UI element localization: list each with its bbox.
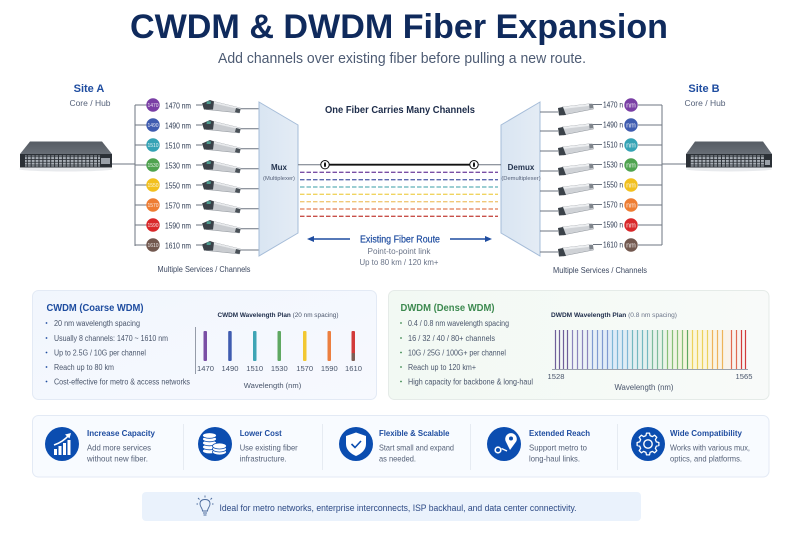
benefit: flexible and scalable: Start small and expand (379, 444, 454, 452)
benefit: increase capacity: Increase Capacity (87, 428, 155, 438)
channel 1470: 1470 n (603, 100, 623, 110)
icon: site A switch (19, 142, 113, 172)
benefit: wide compatibility: optics, and platforms. (670, 454, 742, 464)
route detail: Point-to-point link (368, 246, 431, 256)
chart: CWDM wavelength plan: 1490 (222, 364, 238, 373)
CWDM bullet list (46, 319, 190, 386)
benefit: lower cost: Lower Cost (240, 428, 282, 438)
chart: DWDM wavelength plan: 1565 (736, 372, 752, 381)
mux block: Mux (271, 163, 288, 172)
demux block (501, 102, 541, 256)
channel 1590: 1590 nm (165, 220, 191, 230)
channel 1490: 1490 nm (165, 120, 191, 130)
benefit: extended reach: long-haul links. (529, 454, 580, 464)
arrow: route left (307, 236, 350, 242)
DWDM heading: DWDM (Dense WDM) (400, 303, 494, 314)
chart: CWDM wavelength plan: 1470 (197, 364, 214, 373)
channel 1590: 1590 n (603, 220, 623, 230)
channel 1550: 1550 nm (165, 180, 191, 190)
channel 1570: 1570 nm (165, 200, 191, 210)
site B heading: Site B (688, 83, 720, 95)
channel 1530 (146, 158, 259, 173)
channel 1530: 1530 nm (165, 160, 191, 170)
channel 1550: 1550 n (603, 180, 623, 190)
CWDM heading: CWDM (Coarse WDM) (46, 303, 144, 314)
fiber link (298, 160, 501, 169)
panel: benefits (32, 416, 769, 477)
channel 1610 (540, 238, 638, 256)
benefit: flexible and scalable (339, 427, 454, 464)
channel 1610: 1610 nm (165, 240, 191, 250)
benefit: increase capacity: without new fiber. (86, 454, 148, 464)
route detail: Up to 80 km / 120 km+ (360, 257, 439, 267)
chart: CWDM wavelength plan: CWDM Wavelength Plan (20 nm spacing) (218, 312, 338, 319)
channel 1550 (146, 178, 259, 193)
route label: Existing Fiber Route (360, 234, 440, 246)
channel 1470 (540, 98, 638, 116)
callout: ideal uses (142, 492, 641, 521)
channel 1470: nm (626, 102, 636, 110)
channel 1530 (540, 158, 638, 176)
site B bus wiring (638, 105, 686, 245)
icon: route pins (487, 427, 521, 461)
icon: shield (339, 427, 373, 461)
channel 1570 (146, 198, 259, 213)
channel 1510: 1510 n (603, 140, 623, 150)
benefit: wide compatibility (631, 427, 750, 464)
chart: CWDM wavelength plan: 1610 (345, 364, 362, 373)
benefit: lower cost: Use existing fiber (240, 444, 298, 452)
channel 1570: nm (626, 202, 636, 210)
route detail (360, 246, 439, 267)
DWDM bullet list: 0.4 / 0.8 nm wavelength spacing (408, 319, 509, 328)
CWDM bullet list: Usually 8 channels: 1470 ~ 1610 nm (54, 334, 168, 343)
channel 1550: 1550 (147, 183, 159, 189)
channel 1530: 1530 (147, 163, 159, 169)
CWDM bullet list: 20 nm wavelength spacing (54, 319, 140, 328)
title: CWDM & DWDM Fiber Expansion (130, 8, 668, 46)
site A role: Core / Hub (69, 98, 111, 108)
icon: coins (198, 427, 232, 461)
CWDM bullet list: Reach up to 80 km (54, 363, 114, 372)
channel 1510: nm (626, 142, 636, 150)
benefit: lower cost (198, 427, 298, 464)
CWDM bullet list: Up to 2.5G / 10G per channel (54, 348, 146, 358)
benefit: flexible and scalable: as needed. (379, 454, 416, 464)
DWDM bullet list: Reach up to 120 km+ (408, 363, 476, 372)
channel 1530: nm (626, 162, 636, 170)
benefit: wide compatibility: Works with various mux, (670, 444, 750, 452)
channel 1490: nm (626, 122, 636, 130)
channel 1610 (146, 238, 259, 254)
channel 1510 (540, 138, 638, 156)
site A heading: Site A (74, 83, 104, 95)
chart: CWDM wavelength plan (196, 312, 362, 390)
channel 1510 (146, 138, 259, 153)
demux block: Demux (508, 163, 535, 172)
channel 1470: 1470 (147, 103, 159, 109)
panel: site A network diagram (19, 83, 259, 274)
panel: CWDM (32, 290, 376, 400)
chart: CWDM wavelength plan: 1570 (296, 364, 313, 373)
benefit: extended reach: Extended Reach (529, 428, 590, 438)
panel: DWDM (388, 290, 769, 400)
benefit: flexible and scalable: Flexible & Scalable (379, 428, 450, 438)
DWDM bullet list: 10G / 25G / 100G+ per channel (408, 348, 506, 358)
channel 1490 (146, 118, 259, 133)
channel 1610: 1610 (147, 243, 159, 249)
channel 1510: 1510 nm (165, 140, 191, 150)
arrow: route right (450, 236, 492, 242)
chart: DWDM wavelength plan (548, 312, 752, 392)
channel 1590: 1590 (147, 223, 159, 229)
channel 1570: 1570 n (603, 200, 623, 210)
subtitle: Add channels over existing fiber before pulling a new route. (218, 51, 586, 67)
mux block (259, 102, 298, 256)
site A caption: Multiple Services / Channels (158, 265, 250, 274)
icon: gear (631, 427, 665, 461)
site B caption: Multiple Services / Channels (553, 266, 647, 275)
chart: CWDM wavelength plan: 1590 (321, 364, 338, 373)
demux block: (Demultiplexer) (501, 176, 541, 182)
benefit: wide compatibility: Wide Compatibility (670, 428, 742, 438)
channel 1470 (146, 98, 259, 113)
chart: CWDM wavelength plan: 1510 (246, 364, 263, 373)
site A bus wiring (112, 105, 147, 246)
icon: light bulb (196, 496, 214, 515)
channel 1590 (146, 218, 259, 233)
channel 1490: 1490 (147, 123, 159, 129)
icon: growth chart (45, 427, 79, 461)
channel 1490 (540, 118, 638, 136)
panel: site B network diagram (540, 83, 772, 275)
channel 1490: 1490 n (603, 120, 623, 130)
benefit: increase capacity: Add more services (87, 444, 151, 452)
chart: CWDM wavelength plan: Wavelength (nm) (244, 381, 302, 390)
chart: CWDM wavelength plan: 1530 (271, 364, 288, 373)
chart: DWDM wavelength plan: Wavelength (nm) (614, 383, 674, 392)
DWDM bullet list (400, 319, 533, 386)
chart: DWDM wavelength plan: 1528 (548, 372, 564, 381)
CWDM bullet list: Cost-effective for metro & access networks (54, 378, 190, 386)
channel 1570 (540, 198, 638, 216)
channel 1610: nm (626, 242, 636, 250)
wavelength dashes (300, 172, 498, 216)
benefit: extended reach (487, 427, 590, 464)
site B role: Core / Hub (684, 98, 726, 108)
mux block: (Multiplexer) (263, 176, 295, 182)
channel 1510: 1510 (147, 143, 159, 149)
channel 1530: 1530 n (603, 160, 623, 170)
DWDM bullet list: 16 / 32 / 40 / 80+ channels (408, 334, 495, 343)
channel 1470: 1470 nm (165, 100, 191, 110)
channel 1610: 1610 n (603, 240, 623, 250)
icon: site B switch (686, 142, 772, 172)
callout: ideal uses: Ideal for metro networks, enterprise interconnects, ISP backhaul, and data center connectivity. (220, 503, 576, 513)
channel 1570: 1570 (147, 203, 159, 209)
benefit: extended reach: Support metro to (529, 444, 587, 452)
chart: DWDM wavelength plan: DWDM Wavelength Plan (0.8 nm spacing) (551, 312, 677, 319)
channel 1590 (540, 218, 638, 236)
center fiber heading: One Fiber Carries Many Channels (325, 105, 475, 116)
DWDM bullet list: High capacity for backbone & long-haul (408, 378, 533, 386)
benefit: increase capacity (45, 427, 155, 464)
channel 1590: nm (626, 222, 636, 230)
channel 1550: nm (626, 182, 636, 190)
channel 1550 (540, 178, 638, 196)
benefit: lower cost: infrastructure. (240, 454, 287, 464)
